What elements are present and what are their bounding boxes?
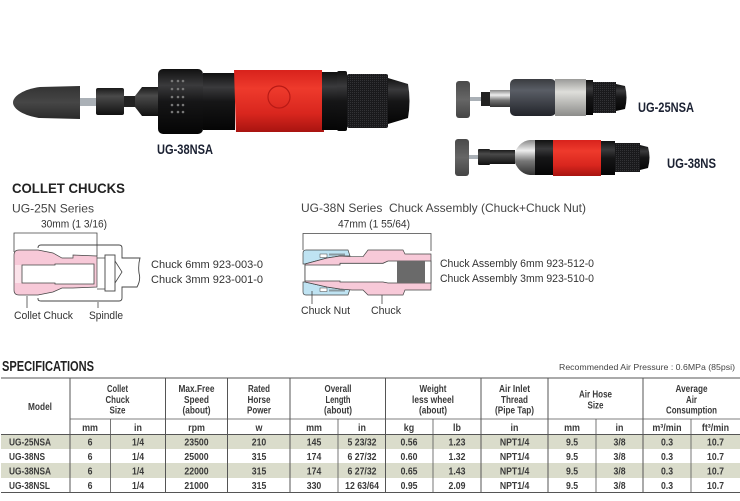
table header: Size bbox=[588, 400, 604, 412]
table header: Consumption bbox=[666, 404, 717, 416]
row: UG-25NSA: 3/8 bbox=[614, 437, 626, 449]
table header: (about) bbox=[324, 404, 352, 416]
row: UG-38NSL: 1/4 bbox=[132, 480, 145, 492]
table header: Overall bbox=[324, 383, 352, 395]
table units row: in bbox=[616, 422, 624, 434]
specifications table bbox=[1, 378, 740, 492]
row: UG-38NS: 174 bbox=[307, 451, 322, 463]
subheading: UG-38N series: UG-38N Series Chuck Assembly (Chuck+Chuck Nut) bbox=[301, 201, 586, 215]
row: UG-38NS: 6 bbox=[88, 451, 92, 463]
row: UG-38NS: 1/4 bbox=[132, 451, 145, 463]
row: UG-25NSA: 23500 bbox=[184, 437, 209, 449]
row: UG-38NSL: 0.95 bbox=[401, 480, 418, 492]
table units row: w bbox=[255, 422, 263, 434]
row: UG-38NS: 315 bbox=[252, 451, 267, 463]
label: UG-38NS: UG-38NS bbox=[667, 155, 716, 171]
diagram: UG-38N chuck assembly bbox=[301, 218, 431, 317]
row: UG-38NS: NPT1/4 bbox=[500, 451, 530, 463]
part numbers: UG-38N chuck assemblies bbox=[440, 258, 594, 285]
table header: Horse bbox=[248, 394, 271, 406]
row: UG-25NSA: 6 bbox=[88, 437, 92, 449]
tool photo: UG-38NS grinder bbox=[455, 139, 650, 176]
table header: Thread bbox=[501, 394, 528, 406]
table units row bbox=[82, 422, 729, 434]
row: UG-38NSA: 0.3 bbox=[661, 466, 673, 478]
table header: Weight bbox=[420, 383, 447, 395]
row: UG-38NSA: 315 bbox=[252, 466, 267, 478]
row: UG-38NSL: 330 bbox=[307, 480, 321, 492]
row: UG-25NSA: 9.5 bbox=[566, 437, 579, 449]
table header: Air Inlet bbox=[499, 383, 530, 395]
row: UG-38NSA: 174 bbox=[307, 466, 322, 478]
table header: less wheel bbox=[412, 394, 454, 406]
diagram: UG-38N chuck assembly: Chuck Nut bbox=[301, 305, 350, 317]
row: UG-25NSA: NPT1/4 bbox=[500, 437, 530, 449]
heading: specifications: SPECIFICATIONS bbox=[2, 359, 94, 375]
label: UG-38NSA: UG-38NSA bbox=[157, 141, 213, 157]
table header: Air Hose bbox=[579, 388, 612, 400]
row: UG-38NSL: UG-38NSL bbox=[9, 480, 50, 492]
table header: (about) bbox=[419, 404, 447, 416]
table units row: in bbox=[134, 422, 142, 434]
row: UG-25NSA: 1/4 bbox=[132, 437, 145, 449]
row: UG-38NS: 9.5 bbox=[566, 451, 579, 463]
table units row: mm bbox=[82, 422, 98, 434]
row: UG-38NSA: 9.5 bbox=[566, 466, 579, 478]
row: UG-38NSL: 2.09 bbox=[449, 480, 465, 492]
label: UG-25NSA: UG-25NSA bbox=[638, 99, 694, 115]
table header: Speed bbox=[184, 394, 209, 406]
row: UG-38NSA: 3/8 bbox=[614, 466, 626, 478]
table header: Collet bbox=[107, 383, 128, 395]
row: UG-38NSA: UG-38NSA bbox=[9, 466, 51, 478]
row: UG-25NSA bbox=[9, 436, 724, 449]
diagram: UG-25N collet chuck: Collet Chuck bbox=[14, 310, 74, 322]
table units row: in bbox=[511, 422, 519, 434]
table header: Power bbox=[247, 404, 271, 416]
table header: Chuck bbox=[106, 394, 130, 406]
row: UG-38NSA: 1/4 bbox=[132, 466, 145, 478]
row: UG-38NSL: 3/8 bbox=[614, 480, 626, 492]
table header: Average bbox=[676, 383, 708, 395]
table units row: mm bbox=[564, 422, 580, 434]
row: UG-38NS: 3/8 bbox=[614, 451, 626, 463]
row: UG-38NSA bbox=[9, 466, 724, 478]
diagram: UG-38N chuck assembly: 47mm (1 55/64) bbox=[338, 218, 410, 230]
part numbers: UG-38N chuck assemblies: Chuck Assembly 6mm 923-512-0 bbox=[440, 258, 594, 270]
subheading: UG-25N series: UG-25N Series bbox=[12, 202, 94, 216]
row: UG-25NSA: 0.3 bbox=[661, 437, 673, 449]
table header: Length bbox=[326, 394, 350, 406]
row: UG-38NSL bbox=[9, 480, 724, 492]
row: UG-38NSA: 1.43 bbox=[449, 466, 465, 478]
row: UG-38NS: 6 27/32 bbox=[347, 451, 377, 463]
row: UG-38NSA: 22000 bbox=[184, 466, 209, 478]
row: UG-25NSA: 5 23/32 bbox=[347, 437, 377, 449]
diagram: UG-38N chuck assembly: Chuck bbox=[371, 305, 402, 317]
tool photo: UG-38NSA grinder bbox=[13, 69, 410, 134]
row: UG-38NSL: 9.5 bbox=[566, 480, 579, 492]
table units row: lb bbox=[453, 422, 461, 434]
table units row: kg bbox=[404, 422, 414, 434]
table units row: ft³/min bbox=[702, 422, 729, 434]
row: UG-38NS: 1.32 bbox=[449, 451, 465, 463]
diagram: UG-25N collet chuck bbox=[14, 218, 140, 322]
note: recommended air pressure: Recommended Air Pressure : 0.6MPa (85psi) bbox=[559, 362, 735, 372]
table header: Max.Free bbox=[178, 383, 215, 395]
row: UG-25NSA: 210 bbox=[252, 437, 266, 449]
table header: Rated bbox=[248, 383, 270, 395]
row: UG-38NS: 10.7 bbox=[707, 451, 724, 463]
table header: Model bbox=[28, 401, 52, 413]
table units row: mm bbox=[306, 422, 322, 434]
row: UG-38NS: 25000 bbox=[184, 451, 209, 463]
row: UG-38NSL: NPT1/4 bbox=[500, 480, 530, 492]
row: UG-38NSL: 21000 bbox=[184, 480, 209, 492]
row: UG-38NSL: 10.7 bbox=[707, 480, 724, 492]
row: UG-25NSA: UG-25NSA bbox=[9, 436, 51, 448]
table units row: m³/min bbox=[652, 422, 682, 434]
table header: (Pipe Tap) bbox=[495, 404, 534, 416]
row: UG-38NSL: 6 bbox=[88, 480, 92, 492]
row: UG-38NSA: 0.65 bbox=[401, 466, 418, 478]
row: UG-38NSA: 10.7 bbox=[707, 466, 724, 478]
row: UG-38NSL: 12 63/64 bbox=[345, 480, 380, 492]
row: UG-25NSA: 145 bbox=[307, 437, 322, 449]
part numbers: UG-25N chucks: Chuck 6mm 923-003-0 bbox=[151, 259, 263, 271]
row: UG-38NSA: NPT1/4 bbox=[500, 466, 530, 478]
row: UG-25NSA: 10.7 bbox=[707, 437, 724, 449]
part numbers: UG-25N chucks bbox=[151, 259, 263, 286]
part numbers: UG-25N chucks: Chuck 3mm 923-001-0 bbox=[151, 274, 263, 286]
row: UG-38NS bbox=[9, 451, 724, 463]
part numbers: UG-38N chuck assemblies: Chuck Assembly 3mm 923-510-0 bbox=[440, 273, 594, 285]
row: UG-25NSA: 0.56 bbox=[401, 437, 417, 449]
row: UG-38NS: 0.60 bbox=[401, 451, 417, 463]
table units row: in bbox=[358, 422, 366, 434]
tool photo: UG-25NSA grinder bbox=[456, 79, 626, 118]
row: UG-25NSA: 1.23 bbox=[449, 437, 465, 449]
row: UG-38NSL: 0.3 bbox=[661, 480, 673, 492]
table header: (about) bbox=[182, 404, 210, 416]
diagram: UG-25N collet chuck: 30mm (1 3/16) bbox=[41, 218, 107, 230]
table header: Size bbox=[110, 404, 126, 416]
heading: collet chucks: COLLET CHUCKS bbox=[12, 181, 125, 196]
row: UG-38NSA: 6 bbox=[88, 466, 92, 478]
table header bbox=[28, 383, 717, 416]
row: UG-38NS: 0.3 bbox=[661, 451, 673, 463]
row: UG-38NSL: 315 bbox=[252, 480, 267, 492]
row: UG-38NSA: 6 27/32 bbox=[347, 466, 377, 478]
table header: Air bbox=[686, 394, 697, 406]
table units row: rpm bbox=[188, 422, 205, 434]
diagram: UG-25N collet chuck: Spindle bbox=[89, 310, 123, 322]
row: UG-38NS: UG-38NS bbox=[9, 451, 45, 463]
